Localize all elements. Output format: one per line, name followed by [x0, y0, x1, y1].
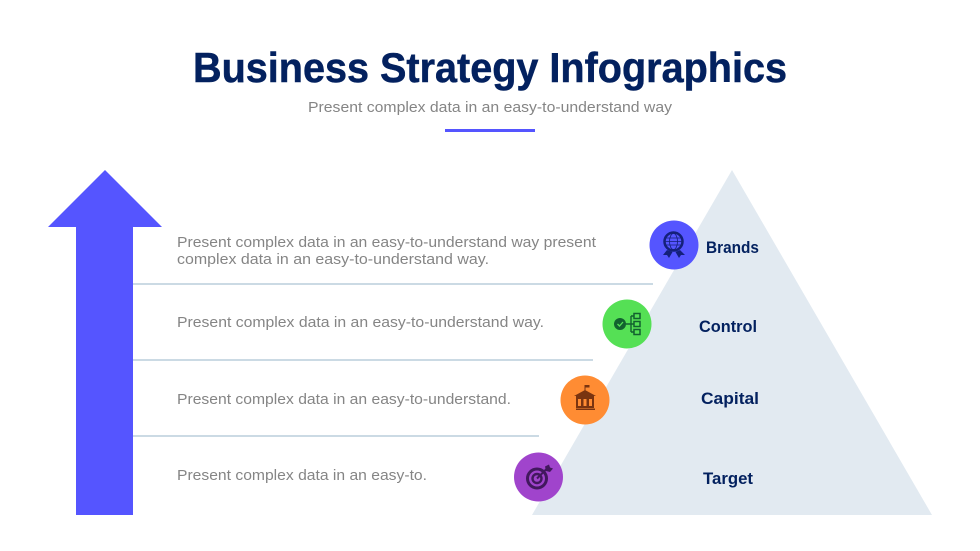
title underline accent	[445, 129, 535, 132]
row 1 description	[177, 234, 597, 268]
row dividers	[133, 283, 653, 437]
label: Control: Control	[699, 318, 757, 336]
pyramid	[532, 170, 932, 515]
icon: award badge	[650, 220, 698, 270]
upward arrow	[48, 170, 162, 515]
icon: target	[514, 452, 563, 502]
title: Business Strategy Infographics	[193, 44, 787, 91]
row 2 description: Present complex data in an easy-to-understand way.	[177, 314, 544, 331]
row 3 description: Present complex data in an easy-to-understand.	[177, 391, 511, 408]
icon: flow chart	[602, 300, 652, 348]
icon: capital building	[560, 376, 610, 424]
label: Target: Target	[703, 470, 754, 488]
row 4 description: Present complex data in an easy-to.	[177, 467, 427, 484]
row 1 description: complex data in an easy-to-understand way.	[177, 251, 489, 268]
row 1 description: Present complex data in an easy-to-understand way present	[177, 234, 597, 251]
subtitle: Present complex data in an easy-to-understand way	[308, 99, 673, 116]
label: Brands: Brands	[706, 239, 759, 257]
label: Capital: Capital	[701, 390, 759, 408]
